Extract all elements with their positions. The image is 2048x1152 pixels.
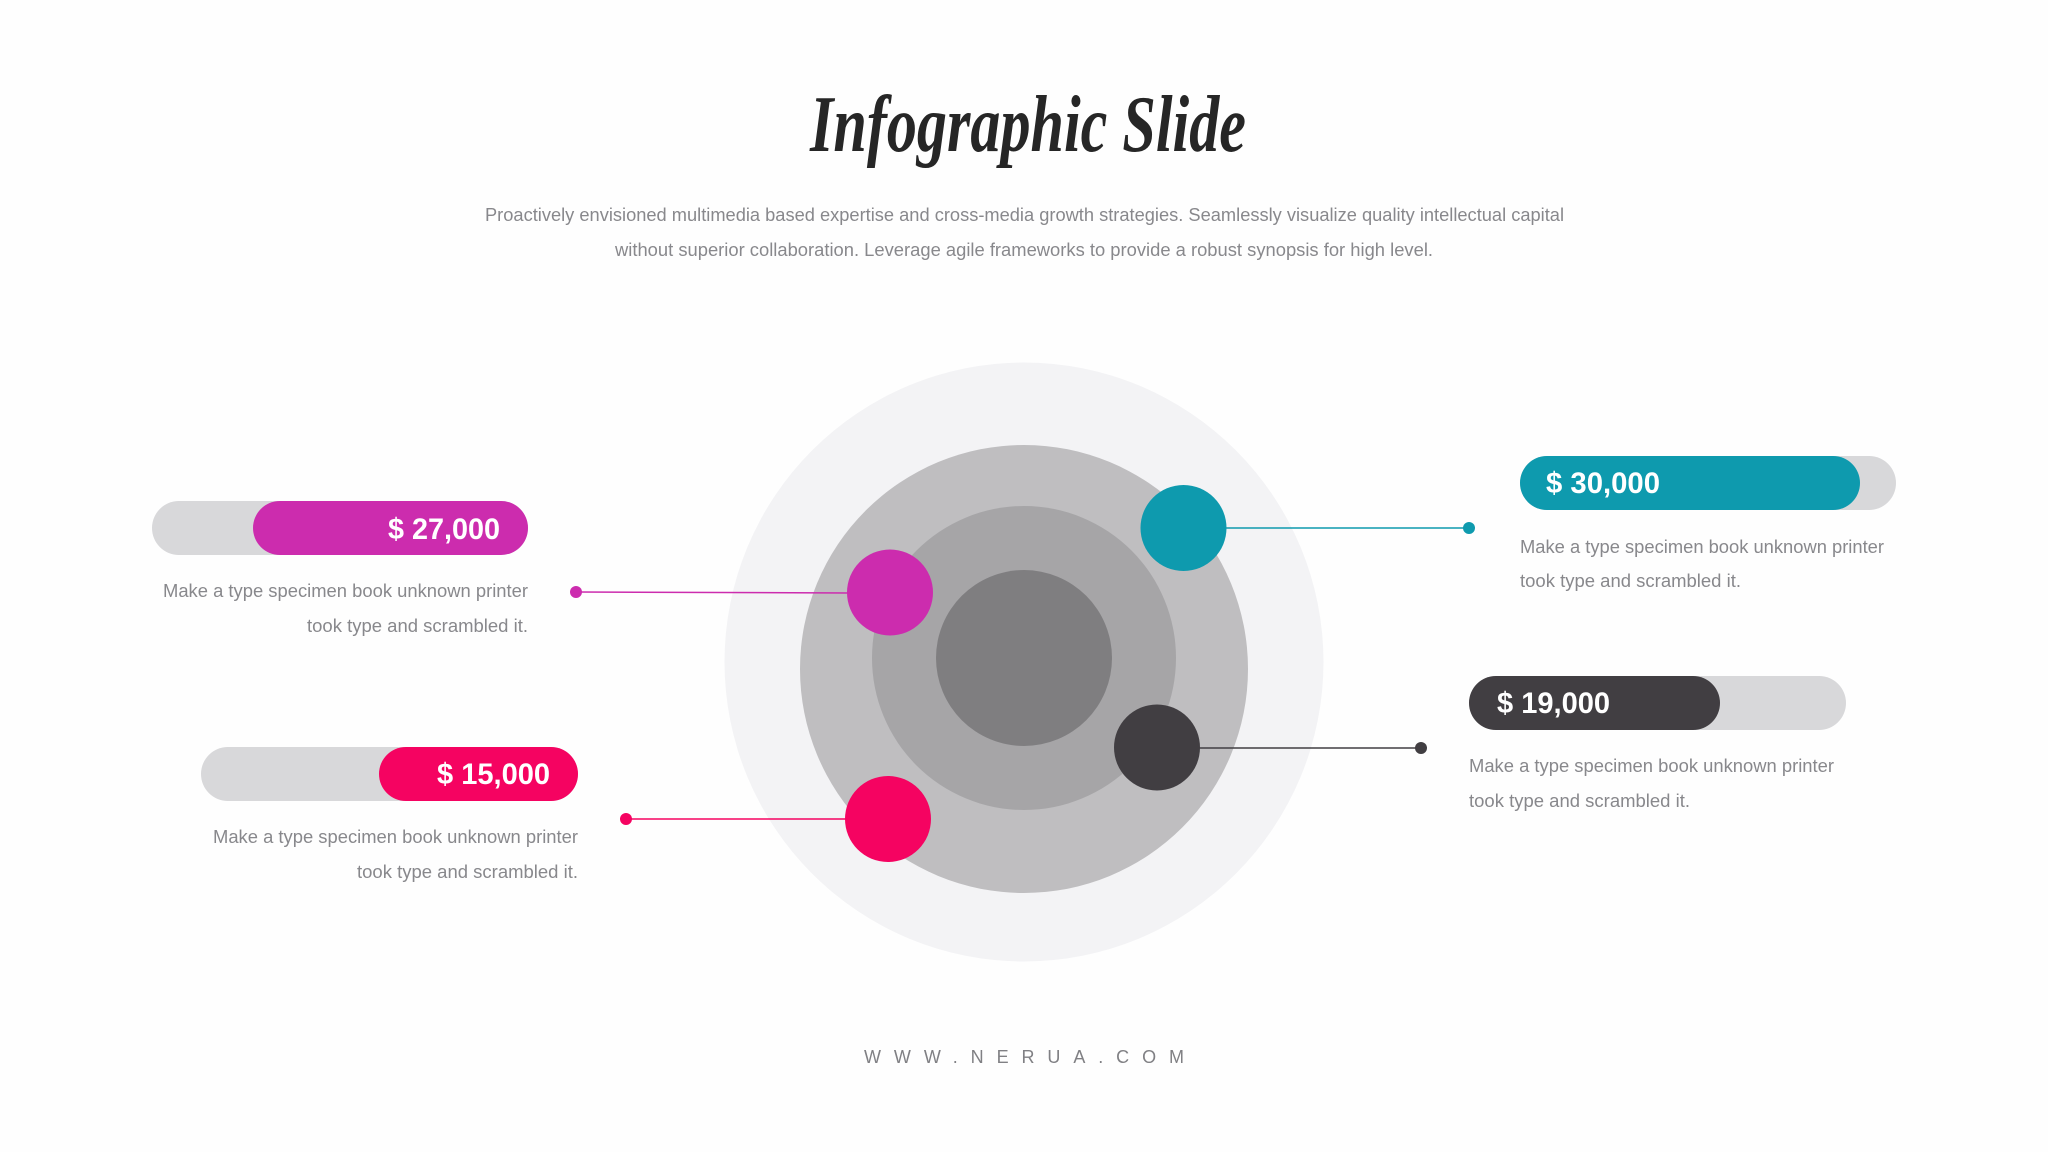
core circle xyxy=(936,570,1112,746)
description xyxy=(1520,537,1884,591)
value: $ 19,000 xyxy=(1497,687,1610,720)
description: Make a type specimen book unknown printer xyxy=(163,581,528,601)
value: $ 15,000 xyxy=(437,758,550,791)
node: dark xyxy=(1114,704,1200,790)
description xyxy=(1469,756,1834,811)
connector: dark xyxy=(1198,742,1427,754)
bar track xyxy=(201,747,578,801)
description: Make a type specimen book unknown printer xyxy=(1520,537,1884,557)
node: teal xyxy=(1140,485,1226,571)
description xyxy=(163,581,528,636)
description: took type and scrambled it. xyxy=(1469,791,1690,811)
concentric circle diagram xyxy=(724,362,1324,962)
panel: 27,000 xyxy=(152,501,528,636)
node: pink xyxy=(845,776,931,862)
title: Infographic Slide xyxy=(809,81,1246,169)
node: magenta xyxy=(847,550,933,636)
subtitle text: without superior collaboration. Leverage agile frameworks to provide a robust synopsis for high level. xyxy=(614,240,1433,260)
subtitle text xyxy=(485,205,1564,260)
value: $ 27,000 xyxy=(388,513,500,546)
bar fill xyxy=(1520,456,1860,510)
bar track xyxy=(1520,456,1896,510)
value: $ 30,000 xyxy=(1546,467,1660,500)
bar fill xyxy=(1469,676,1720,730)
third ring xyxy=(872,506,1176,810)
connector: teal xyxy=(1224,522,1475,534)
connector: pink xyxy=(620,813,848,825)
bar fill xyxy=(379,747,578,801)
second ring xyxy=(800,445,1248,893)
footer url: WWW.NERUA.COM xyxy=(864,1047,1184,1067)
connector: magenta xyxy=(570,586,850,598)
bar track xyxy=(152,501,528,555)
description: took type and scrambled it. xyxy=(1520,571,1741,591)
panel: 19,000 xyxy=(1469,676,1846,811)
panel: 15,000 xyxy=(201,747,578,882)
description: took type and scrambled it. xyxy=(357,862,578,882)
outer ring xyxy=(724,362,1324,962)
description: Make a type specimen book unknown printer xyxy=(1469,756,1834,776)
subtitle text: Proactively envisioned multimedia based expertise and cross-media growth strategies. Seamlessly visualize quality intellectual capital xyxy=(485,205,1564,225)
description: Make a type specimen book unknown printer xyxy=(213,827,578,847)
bar fill xyxy=(253,501,528,555)
bar track xyxy=(1469,676,1846,730)
description xyxy=(213,827,578,882)
description: took type and scrambled it. xyxy=(307,616,528,636)
panel: 30,000 xyxy=(1520,456,1896,591)
